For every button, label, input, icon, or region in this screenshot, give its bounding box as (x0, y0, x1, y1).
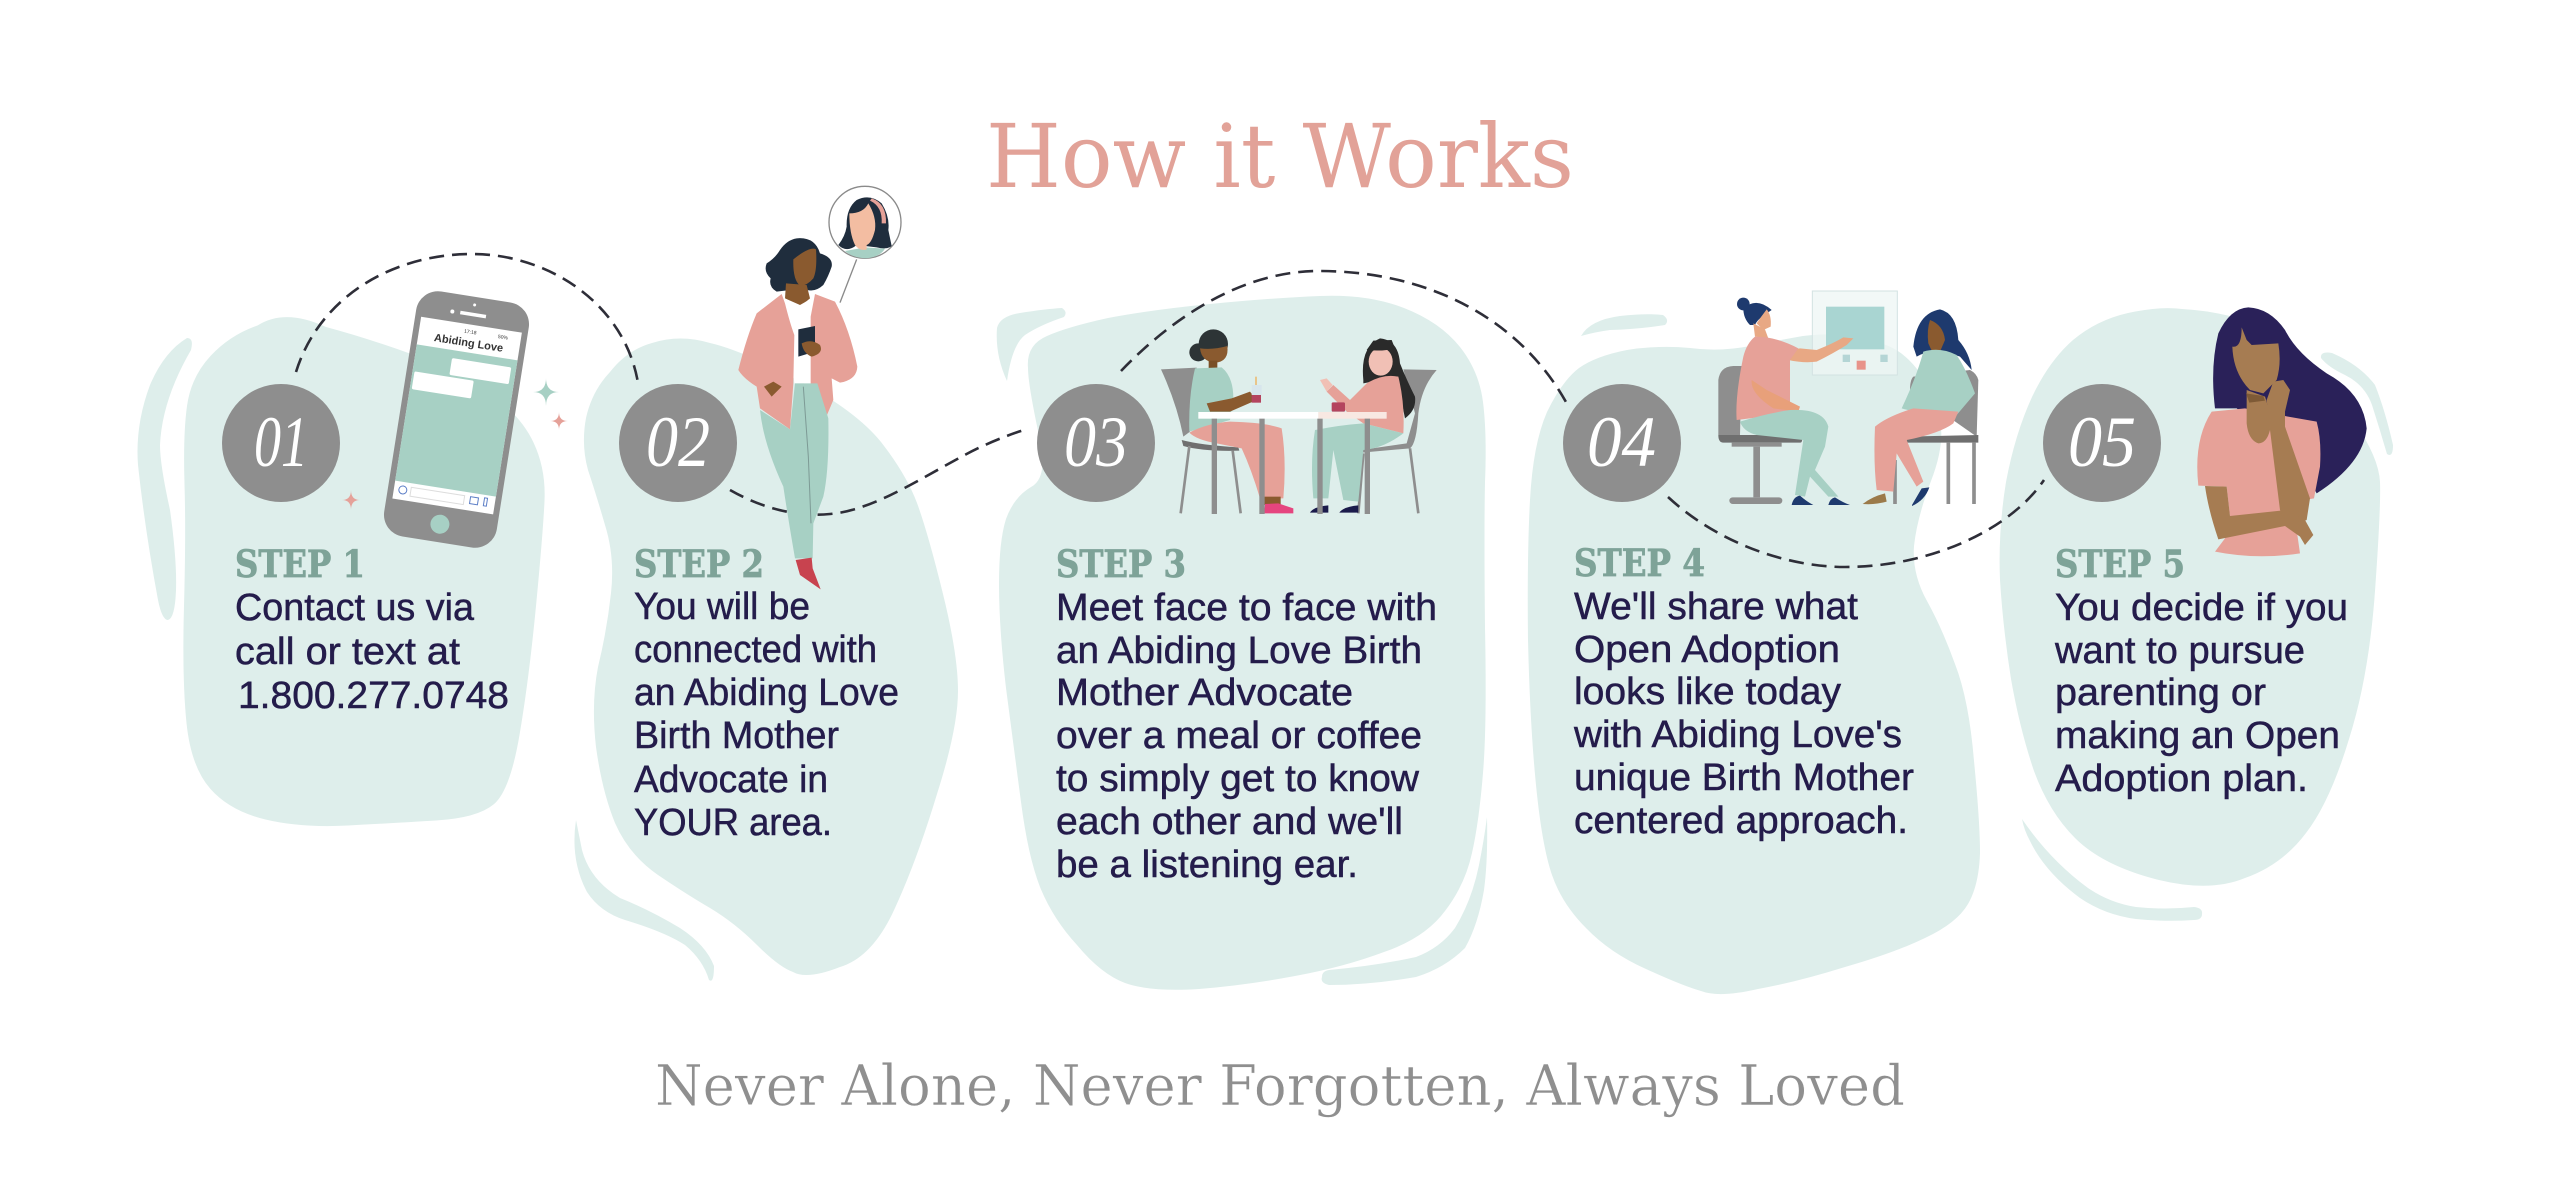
text block: step 2: You will be (634, 586, 810, 628)
text block: step 4: unique Birth Mother (1574, 757, 1914, 799)
text block: step 3: to simply get to know (1056, 758, 1420, 800)
text block: step 2: YOUR area. (634, 802, 832, 844)
text block: step 5: want to pursue (2054, 630, 2305, 672)
icon: smartphone with chat: 50% (497, 334, 509, 342)
icon: smartphone with chat: 17:18 (464, 329, 477, 337)
icon: step number 04 (1563, 384, 1681, 502)
text block: step 2: an Abiding Love (634, 672, 899, 714)
text block: step 3 (1056, 542, 1437, 886)
icon: step number 02 (619, 384, 737, 502)
text block: step 5: making an Open (2055, 715, 2340, 757)
text block: step 1: 1.800.277.0748 (238, 675, 509, 717)
text block: step 1: call or text at (235, 631, 460, 673)
text block: step 1: STEP 1 (235, 542, 365, 586)
icon: step number 01 (222, 384, 340, 502)
text block: step 4: Open Adoption (1574, 629, 1840, 671)
text block: step 4: centered approach. (1574, 800, 1908, 842)
text block: step 3: each other and we'll (1056, 801, 1403, 843)
footer tagline: Never Alone, Never Forgotten, Always Loved (655, 1054, 1905, 1119)
text block: step 3: Meet face to face with (1056, 587, 1437, 629)
icon: step number 05 (2043, 384, 2161, 502)
icon: step number 02: 02 (646, 402, 710, 482)
text block: step 4: looks like today (1574, 671, 1841, 713)
panel: step 1 blob (138, 317, 545, 826)
text block: step 5: Adoption plan. (2055, 758, 2308, 800)
panel: step 2 blob (574, 338, 958, 981)
panel: step 3 blob (997, 296, 1487, 990)
icon: step number 01: 01 (254, 402, 308, 482)
text block: step 1: Contact us via (235, 587, 475, 629)
illustration: two women seated in conversation with board (1718, 291, 1978, 506)
icon: step number 03: 03 (1064, 402, 1128, 482)
illustration: thoughtful woman (2197, 307, 2367, 556)
icon: sparkles (342, 378, 568, 510)
text block: step 3: an Abiding Love Birth (1056, 630, 1422, 672)
text block: step 3: Mother Advocate (1056, 672, 1353, 714)
text block: step 2: Advocate in (634, 759, 828, 801)
text block: step 2: connected with (634, 629, 877, 671)
title: How it Works (986, 105, 1574, 208)
illustration: two women at cafe table (1161, 329, 1437, 514)
icon: step number 03 (1037, 384, 1155, 502)
text block: step 2: Birth Mother (634, 715, 839, 757)
icon: smartphone with chat (381, 288, 532, 551)
text block: step 3: STEP 3 (1056, 542, 1186, 586)
text block: step 1 (235, 542, 509, 717)
icon: step number 04: 04 (1587, 402, 1656, 482)
text block: step 2: STEP 2 (634, 542, 764, 586)
illustration: woman holding phone with advocate bubble (738, 186, 901, 589)
text block: step 4: with Abiding Love's (1573, 714, 1902, 756)
text block: step 3: be a listening ear. (1056, 844, 1358, 886)
arrow: dashed connectors between steps (296, 254, 2044, 567)
panel: step 4 blob (1528, 314, 1980, 994)
text block: step 4: STEP 4 (1574, 541, 1705, 585)
icon: smartphone with chat: Abiding Love (433, 332, 504, 355)
text block: step 5: You decide if you (2055, 587, 2348, 629)
text block: step 4: We'll share what (1574, 586, 1858, 628)
text block: step 5 (2054, 542, 2348, 800)
panel: step 5 blob (2000, 308, 2393, 921)
text block: step 3: over a meal or coffee (1056, 715, 1422, 757)
text block: step 4 (1573, 541, 1914, 842)
text block: step 5: parenting or (2055, 672, 2266, 714)
text block: step 2 (634, 542, 899, 844)
text block: step 5: STEP 5 (2055, 542, 2185, 586)
icon: step number 05: 05 (2068, 402, 2136, 482)
